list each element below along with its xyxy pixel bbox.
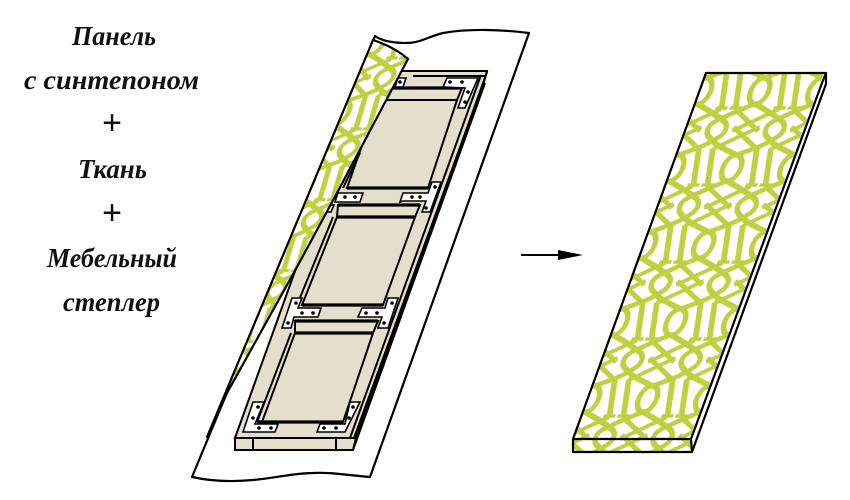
- lower window: [257, 321, 378, 422]
- illustration: panel on fabric with fold: [192, 30, 529, 481]
- bracket: top right: [443, 78, 478, 108]
- metal brackets: [243, 78, 478, 432]
- text: furniture stapler line 1: Мебельный: [46, 243, 177, 273]
- text: panel with padding line 2: с синтепоном: [24, 65, 199, 95]
- text: plus two: +: [102, 194, 122, 232]
- upper window: [343, 88, 462, 188]
- text: plus one: +: [102, 104, 122, 142]
- bracket: upper row right: [400, 182, 441, 212]
- panel top face with trellis pattern: [573, 73, 824, 439]
- fabric sheet: [192, 30, 529, 481]
- panel front face with pattern: [573, 439, 692, 452]
- text: panel with padding line 1: Панель: [71, 21, 156, 51]
- heading: materials list: [24, 21, 199, 317]
- text: furniture stapler line 2: степлер: [63, 287, 160, 317]
- middle window: [297, 205, 420, 305]
- wooden panel: [235, 71, 487, 450]
- panel top face: [235, 71, 487, 438]
- bracket: bottom right: [317, 402, 360, 432]
- arrow: [521, 250, 583, 260]
- text: fabric: Ткань: [78, 154, 147, 184]
- illustration: finished upholstered panel: [573, 73, 826, 452]
- bracket: lower row left: [282, 298, 321, 328]
- folded fabric flap: [207, 40, 408, 437]
- bracket: bottom left: [243, 402, 278, 432]
- panel side lines: [253, 72, 487, 450]
- bracket: upper row left: [325, 193, 363, 212]
- panel outline: [573, 73, 826, 452]
- bracket: top left: [395, 78, 406, 87]
- bracket: lower row right: [358, 298, 398, 328]
- panel front face: [235, 438, 356, 450]
